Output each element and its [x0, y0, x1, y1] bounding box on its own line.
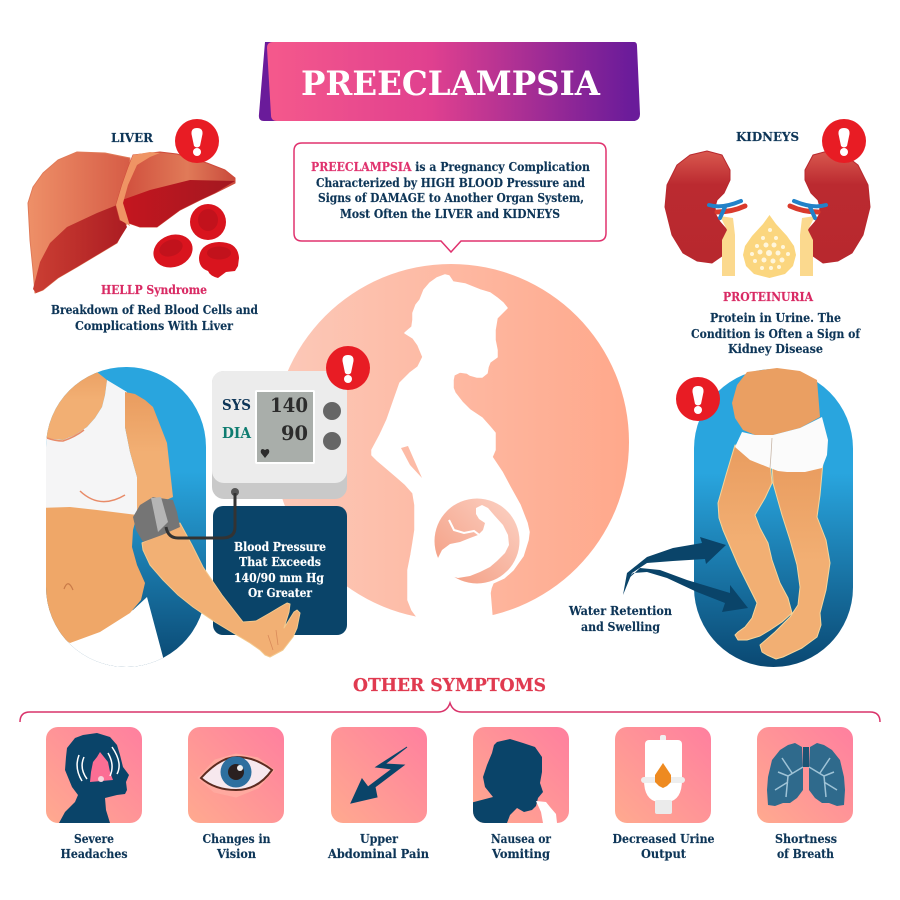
- alert icon: blood pressure: [326, 346, 370, 390]
- red blood cells: [149, 204, 239, 278]
- liver description: Complications With Liver: [75, 319, 234, 333]
- symptom: shortness of breath: [757, 727, 853, 861]
- symptom: changes in vision: [188, 727, 284, 861]
- swelling label: and Swelling: [581, 620, 661, 634]
- monitor: 140: [270, 393, 308, 417]
- symptom: severe headaches: Severe: [74, 832, 114, 846]
- HELLP text: HELLP Syndrome: [101, 283, 207, 297]
- liver illustration: [28, 152, 235, 293]
- symptom: nausea or vomiting: Vomiting: [491, 847, 551, 861]
- alert icon: swelling: [676, 377, 720, 421]
- callout box: Signs of DAMAGE to Another Organ System,: [318, 191, 584, 205]
- info box: [213, 506, 347, 635]
- blood pressure illustration: [40, 346, 370, 680]
- kidneys panel: [665, 119, 870, 356]
- symptom: decreased urine output: Output: [641, 847, 686, 861]
- monitor: 90: [281, 421, 308, 445]
- forearm and hand: [142, 523, 300, 657]
- alert icon: liver: [175, 119, 219, 163]
- callout box: Most Often the LIVER and KIDNEYS: [340, 207, 560, 221]
- info box: That Exceeds: [239, 555, 321, 569]
- underwear: [66, 597, 164, 667]
- liver panel: [28, 119, 259, 333]
- callout box: PREECLAMPSIA is a Pregnancy Complication: [311, 160, 590, 174]
- womb with fetus: [434, 498, 520, 584]
- symptom: nausea or vomiting: Nausea or: [491, 832, 552, 846]
- symptom: severe headaches: Headaches: [60, 847, 128, 861]
- symptom: severe headaches: [46, 727, 142, 861]
- liver description: Breakdown of Red Blood Cells and: [51, 303, 259, 317]
- shoulder and chest: [46, 372, 107, 440]
- belly: [732, 368, 820, 435]
- left leg: [718, 445, 792, 640]
- swelling label: Water Retention: [568, 604, 672, 618]
- other symptoms section: [20, 675, 880, 861]
- proteinuria description: Protein in Urine. The: [710, 311, 841, 325]
- kidneys heading: KIDNEYS: [736, 130, 799, 144]
- symptom: decreased urine output: [612, 727, 715, 861]
- liver description: [51, 303, 259, 333]
- swelling illustration: [568, 368, 853, 667]
- symptom: decreased urine output: Decreased Urine: [612, 832, 715, 846]
- blood vessels: [717, 206, 745, 212]
- liver heading: LIVER: [111, 131, 154, 145]
- proteinuria description: Condition is Often a Sign of: [691, 327, 861, 341]
- cuff and tube: [133, 493, 235, 542]
- symptom: shortness of breath: Shortness: [775, 832, 837, 846]
- info box: Or Greater: [248, 586, 313, 600]
- monitor: SYS: [222, 397, 251, 414]
- legs pill: [694, 369, 853, 667]
- callout box: [294, 143, 606, 252]
- proteinuria description: Kidney Disease: [728, 342, 823, 356]
- ureters: [720, 216, 735, 276]
- arrows pointing to swelling: [623, 537, 748, 612]
- symptom: changes in vision: Vision: [216, 847, 256, 861]
- section heading: OTHER SYMPTOMS: [353, 675, 546, 696]
- underwear: [735, 417, 828, 472]
- info box: Blood Pressure: [234, 540, 326, 554]
- urine drop: [743, 215, 796, 278]
- title banner: [259, 42, 640, 121]
- symptom: shortness of breath: of Breath: [777, 847, 834, 861]
- monitor: [212, 371, 347, 499]
- belly: [40, 507, 145, 643]
- symptom: upper abdominal pain: Upper: [360, 832, 399, 846]
- proteinuria description: [691, 311, 861, 356]
- right leg: [760, 462, 830, 659]
- symptom: upper abdominal pain: [327, 727, 429, 861]
- symptom: nausea or vomiting: [470, 727, 569, 861]
- symptom: changes in vision: Changes in: [202, 832, 271, 846]
- monitor: DIA: [222, 425, 252, 442]
- symptom: upper abdominal pain: Abdominal Pain: [327, 847, 429, 861]
- info box: 140/90 mm Hg: [234, 571, 325, 585]
- alert icon: kidneys: [822, 119, 866, 163]
- proteinuria heading: PROTEINURIA: [723, 290, 814, 304]
- woman torso pill: [40, 360, 206, 680]
- kidneys illustration: [665, 151, 870, 278]
- callout box: Characterized by HIGH BLOOD Pressure and: [316, 176, 586, 190]
- central circle with pregnant silhouette: [273, 264, 629, 621]
- white tank top: [40, 380, 137, 515]
- swelling label: [568, 604, 672, 634]
- upper arm: [125, 392, 173, 513]
- title banner: PREECLAMPSIA: [301, 64, 601, 104]
